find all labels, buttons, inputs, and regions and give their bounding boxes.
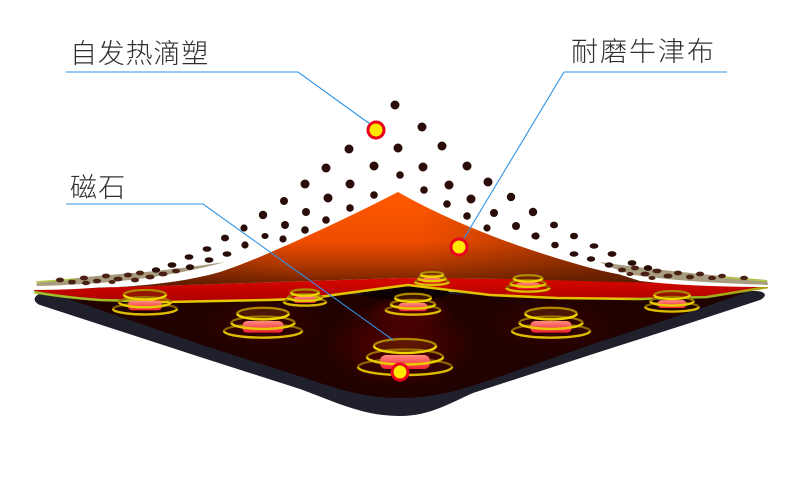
right edge of dotted foam layer [600, 262, 768, 287]
magnet: left small [113, 290, 177, 314]
magnet: left middle [224, 308, 302, 338]
magnet: center large [358, 339, 452, 375]
magnet: center back [386, 294, 440, 315]
dots: self-heating dispensed beads [152, 100, 652, 273]
magnet: right small [645, 291, 699, 312]
outer fabric dome [60, 192, 740, 289]
magnet: right middle [512, 308, 590, 338]
left edge of dotted foam layer [33, 261, 232, 290]
label: magnet: 磁石 [70, 173, 126, 203]
marker: magnet [392, 364, 408, 380]
label: self-heating beads: 自发热滴塑 [70, 39, 209, 69]
red fold band with yellow edge [33, 278, 768, 302]
marker: beads [368, 122, 384, 138]
label: oxford fabric: 耐磨牛津布 [571, 37, 716, 67]
magnet: on fabric center [415, 272, 449, 285]
magnet: on fabric right [506, 275, 550, 292]
leader line: oxford fabric [463, 72, 727, 240]
magnet: left back [284, 289, 326, 306]
base pad: dark border and inner surface [35, 286, 765, 416]
marker: fabric [451, 239, 467, 255]
leader line: magnet [66, 204, 393, 340]
leader line: self-heating beads [66, 72, 370, 124]
